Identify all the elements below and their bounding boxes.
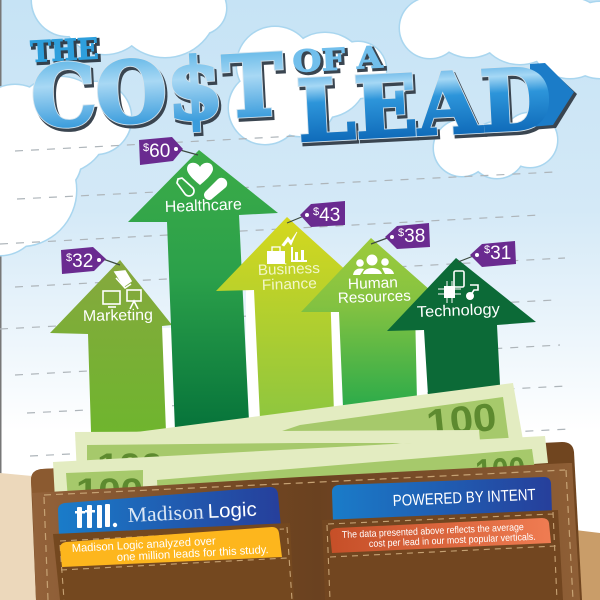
- banknotes: [53, 383, 548, 510]
- label: technology: Technology: [417, 301, 500, 321]
- label: human resources: Resources: [338, 287, 411, 307]
- icon: people: [353, 254, 394, 275]
- arrow: business finance: [216, 217, 360, 419]
- logo: Madison Logic: [75, 504, 117, 528]
- card: POWERED BY INTENT: [332, 477, 552, 522]
- price tag: $38: $: [398, 227, 404, 239]
- price tag: $60: 60: [149, 141, 170, 162]
- banknote: top right: [75, 383, 523, 470]
- price tag: $31: [458, 241, 516, 267]
- title word: THE: THE: [30, 31, 99, 69]
- price tag: $60: [139, 137, 198, 165]
- wallet back: [31, 442, 582, 600]
- banknote: lower: 100: [76, 472, 143, 510]
- callout: yellow: [60, 527, 282, 567]
- card: Madison Logic: [58, 487, 281, 536]
- callout: orange: [330, 518, 551, 553]
- title word: LEAD: LEAD: [297, 52, 556, 164]
- price tag: $60: $: [143, 142, 149, 154]
- wordmark: Logic: [207, 499, 257, 523]
- arrow: technology: [387, 258, 536, 395]
- right pocket: [322, 510, 563, 600]
- callout: orange: The data presented above reflects the average: [342, 522, 524, 541]
- left pocket: [53, 523, 294, 600]
- title: [29, 31, 577, 164]
- dashed grid lines: [0, 136, 570, 456]
- icon: marketing: [103, 271, 141, 309]
- price tag: $32: 32: [72, 251, 93, 272]
- icon: healthcare: [177, 163, 227, 200]
- card heading: POWERED BY INTENT: [392, 487, 536, 510]
- white gaps between arrow shafts: [160, 290, 427, 432]
- icon: business finance: [267, 232, 307, 264]
- label: human resources: [338, 274, 411, 307]
- callout: yellow: Madison Logic analyzed over: [72, 535, 216, 555]
- arrow: marketing: [50, 260, 172, 432]
- title word: CO$T: CO$T: [31, 38, 288, 150]
- title word: LEAD: LEAD: [295, 49, 554, 161]
- title word: OF A: OF A: [292, 40, 384, 80]
- wordmark: Madison: [127, 499, 205, 527]
- price tag: $32: [61, 247, 120, 274]
- banknote: lower: [53, 436, 548, 510]
- label: business finance: Finance: [262, 275, 317, 294]
- price tag: $38: 38: [404, 226, 425, 247]
- callout: orange: cost per lead in our most popular verticals.: [369, 532, 536, 550]
- price tag: $43: $: [313, 206, 319, 218]
- banknote: middle: 100: [97, 447, 163, 485]
- title word: OF A: OF A: [294, 42, 386, 82]
- label: marketing: Marketing: [83, 307, 153, 325]
- price tag: $32: $: [66, 252, 72, 264]
- label: business finance: [258, 260, 320, 294]
- wordmark: [127, 499, 257, 527]
- arrow: human resources: [301, 238, 447, 407]
- callout: yellow: one million leads for this study.: [117, 544, 269, 564]
- price tag: $31: 31: [490, 243, 511, 264]
- title word: LEAD: LEAD: [295, 49, 554, 161]
- banknote: middle: [75, 430, 480, 485]
- title word: CO$T: CO$T: [29, 35, 286, 147]
- price tag: $31: $: [484, 244, 490, 256]
- clouds: [0, 0, 600, 255]
- banknote: lower: 100: [474, 450, 526, 491]
- icon: technology: [438, 271, 478, 303]
- title word: THE: THE: [32, 33, 101, 71]
- table surface: [0, 473, 600, 600]
- arrow: healthcare: [128, 150, 278, 431]
- price tag: $43: 43: [319, 205, 340, 226]
- banknote: top right: 100: [424, 396, 499, 446]
- title word: CO$T: CO$T: [29, 35, 286, 147]
- label: business finance: Business: [258, 260, 320, 279]
- label: healthcare: Healthcare: [165, 196, 242, 216]
- wallet front: [32, 463, 580, 600]
- price tag: $43: [287, 201, 345, 227]
- label: human resources: Human: [348, 274, 398, 293]
- price tag: $38: [371, 223, 430, 249]
